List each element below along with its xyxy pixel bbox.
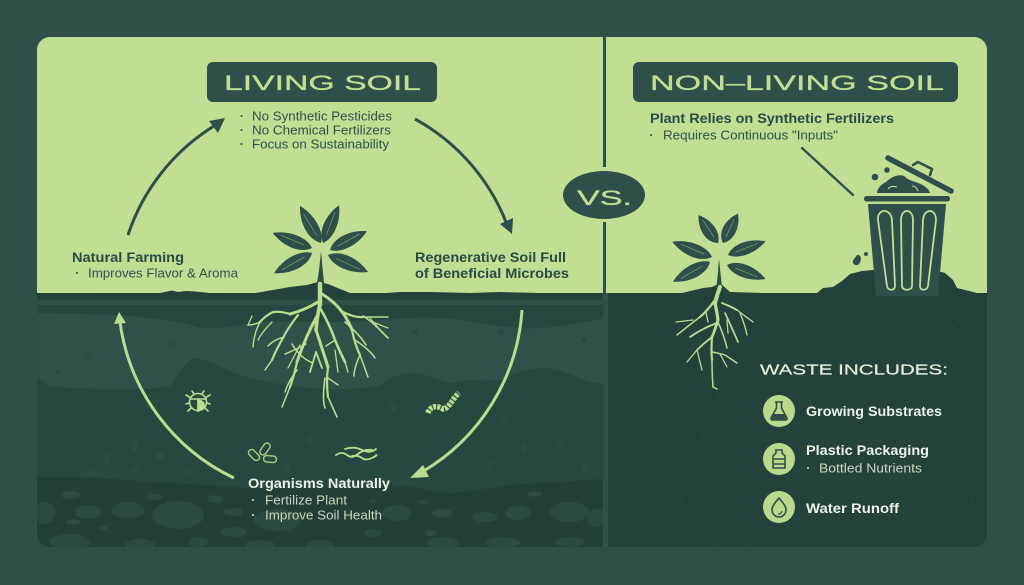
text: plant relies on synthetic fertilizers	[650, 111, 894, 142]
title: non-living soil	[633, 62, 958, 102]
item: plastic packaging	[763, 443, 929, 476]
roots	[676, 287, 753, 389]
text: living soil bullets: Focus on Sustainability	[252, 138, 390, 152]
text: natural farming: Natural Farming	[72, 250, 184, 265]
title: living soil	[207, 62, 437, 102]
icon: beetle	[186, 391, 210, 411]
vs badge	[563, 171, 645, 219]
item: growing substrates: Growing Substrates	[806, 404, 942, 419]
icon: nematodes	[336, 448, 376, 460]
title: non-living soil: NON–LIVING SOIL	[650, 71, 944, 95]
item: water runoff: Water Runoff	[806, 501, 900, 516]
text: living soil bullets: No Chemical Fertilizers	[252, 124, 391, 138]
text: living soil bullets	[240, 110, 392, 152]
arrow: right-down	[415, 119, 513, 234]
leaves	[670, 210, 768, 288]
text: living soil bullets: No Synthetic Pesticides	[252, 110, 392, 124]
lid	[888, 158, 951, 191]
soil: living soil layers	[35, 293, 608, 551]
plant: living soil	[248, 203, 388, 417]
icon: trash can	[853, 158, 951, 296]
divider lower	[603, 222, 606, 293]
vs badge: VS.	[577, 187, 632, 210]
icon: bacteria	[247, 442, 277, 463]
ground line: living soil	[160, 282, 539, 293]
text: natural farming: Improves Flavor & Aroma	[88, 266, 238, 280]
plant: non-living soil	[670, 210, 768, 389]
arrow: bottom left	[114, 312, 234, 478]
text: organisms naturally	[248, 476, 391, 522]
rim	[864, 196, 950, 202]
item: growing substrates	[763, 395, 942, 427]
text: plant relies on synthetic fertilizers: Requires Continuous "Inputs"	[663, 128, 838, 142]
text: regenerative soil	[415, 250, 569, 281]
item: plastic packaging: Bottled Nutrients	[819, 462, 922, 476]
ground line: non-living soil with mound	[682, 270, 977, 293]
divider	[603, 37, 606, 167]
waste list	[760, 362, 948, 523]
leaves	[270, 203, 371, 283]
roots	[248, 284, 388, 417]
soil: non-living soil	[608, 293, 987, 547]
text: plant relies on synthetic fertilizers: Plant Relies on Synthetic Fertilizers	[650, 111, 894, 126]
text: organisms naturally: Improve Soil Health	[265, 508, 382, 522]
trash contents	[877, 175, 930, 193]
text: organisms naturally: Organisms Naturally	[248, 476, 391, 491]
arrow: bottom right	[410, 310, 522, 478]
title: living soil: LIVING SOIL	[224, 71, 421, 95]
item: water runoff	[763, 491, 900, 523]
pointer line to trash can	[802, 148, 853, 195]
divider through soil	[603, 293, 608, 547]
spill drops	[853, 255, 861, 265]
body	[868, 204, 946, 296]
item: plastic packaging: Plastic Packaging	[806, 443, 929, 458]
slots	[878, 211, 936, 290]
text: regenerative soil: of Beneficial Microbes	[415, 266, 569, 281]
sky: light upper area	[37, 37, 987, 297]
arrow: left-up	[128, 118, 225, 235]
heading: waste includes: WASTE INCLUDES:	[760, 362, 948, 378]
icon: worm	[428, 393, 459, 413]
text: natural farming	[72, 250, 238, 280]
text: organisms naturally: Fertilize Plant	[265, 494, 348, 508]
text: regenerative soil: Regenerative Soil Full	[415, 250, 566, 265]
